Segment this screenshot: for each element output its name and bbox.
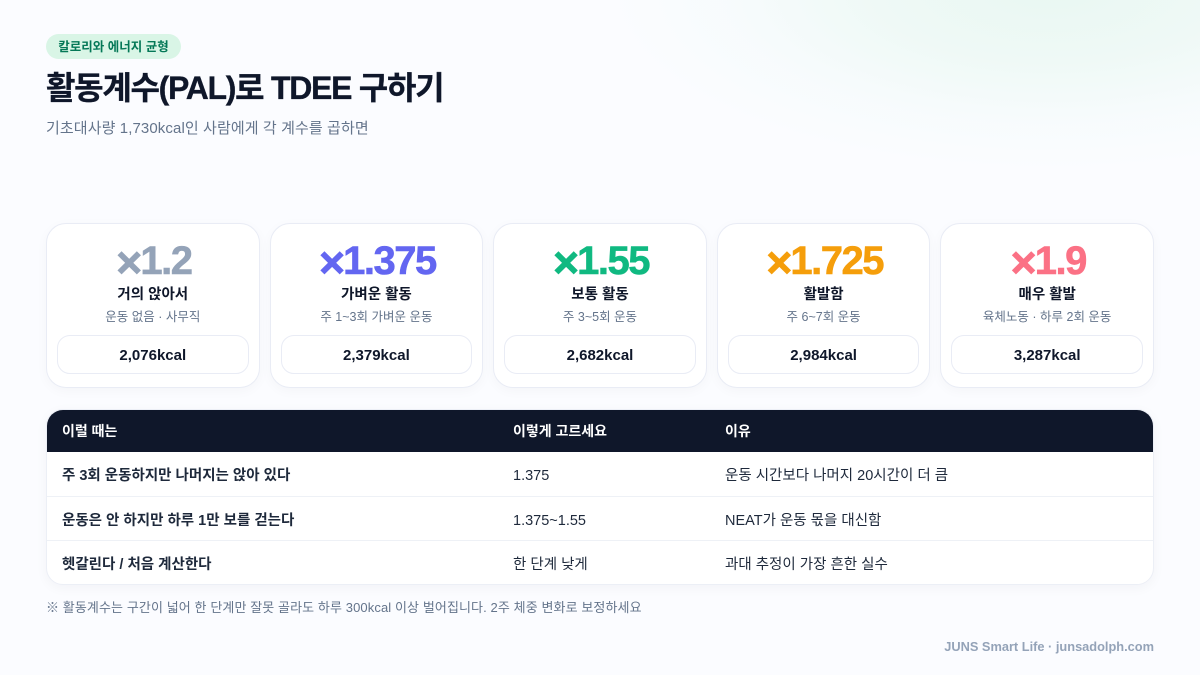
footnote: ※ 활동계수는 구간이 넓어 한 단계만 잘못 골라도 하루 300kcal 이상 벌어집니다. 2주 체중 변화로 보정하세요 [46, 600, 642, 615]
multiplier: ×1.2 [114, 239, 191, 283]
table row 2 [47, 497, 1153, 541]
kcal value: 2,379kcal [343, 347, 410, 364]
multiplier: ×1.375 [317, 239, 436, 283]
card: 가벼운 활동 [270, 223, 483, 388]
table header: 이렇게 고르세요 [513, 423, 607, 439]
activity name: 가벼운 활동 [341, 287, 412, 303]
table header [47, 410, 1153, 452]
kcal value [504, 335, 696, 374]
activity name: 거의 앉아서 [117, 287, 188, 303]
kcal value [728, 335, 919, 374]
table row 3: 과대 추정이 가장 흔한 실수 [725, 557, 888, 573]
kcal value: 2,984kcal [790, 347, 857, 364]
card: 매우 활발 [940, 223, 1154, 388]
kcal value: 3,287kcal [1014, 347, 1081, 364]
table row 3: 한 단계 낮게 [513, 557, 588, 573]
table row 3: 헷갈린다 / 처음 계산한다 [62, 557, 212, 573]
multiplier: ×1.725 [764, 239, 883, 283]
kcal value [951, 335, 1143, 374]
subtitle: 기초대사량 1,730kcal인 사람에게 각 계수를 곱하면 [46, 120, 369, 137]
kcal value: 2,682kcal [567, 347, 633, 364]
activity name: 매우 활발 [1018, 287, 1076, 303]
table row 1: 운동 시간보다 나머지 20시간이 더 큼 [725, 468, 948, 484]
badge: 칼로리와 에너지 균형 [58, 40, 169, 54]
title: 활동계수(PAL)로 TDEE 구하기 [46, 70, 443, 106]
description: 주 1~3회 가벼운 운동 [320, 310, 432, 324]
table header: 이유 [725, 423, 751, 439]
kcal value: 2,076kcal [119, 347, 186, 364]
kcal value [281, 335, 472, 374]
card: 활발함 [717, 223, 930, 388]
badge [46, 34, 181, 59]
recommendation table [46, 409, 1154, 585]
description: 주 6~7회 운동 [787, 310, 861, 324]
table row 3 [62, 556, 888, 573]
card: 거의 앉아서 [46, 223, 260, 388]
table header: 이럴 때는 [62, 423, 117, 439]
description: 육체노동 · 하루 2회 운동 [983, 310, 1111, 324]
multiplier: ×1.9 [1009, 239, 1086, 283]
table row 2: 운동은 안 하지만 하루 1만 보를 걷는다 [62, 513, 294, 529]
table row 1 [47, 452, 1153, 497]
activity name: 활발함 [804, 287, 844, 303]
card: 보통 활동 [493, 223, 707, 388]
description: 운동 없음 · 사무직 [105, 310, 200, 324]
activity name: 보통 활동 [571, 287, 629, 303]
source credit: JUNS Smart Life · junsadolph.com [944, 639, 1154, 654]
table row 1: 1.375 [513, 468, 549, 484]
multiplier: ×1.55 [551, 239, 649, 283]
kcal value [57, 335, 249, 374]
description: 주 3~5회 운동 [563, 310, 637, 324]
table row 2: NEAT가 운동 몫을 대신함 [725, 513, 881, 529]
table row 1: 주 3회 운동하지만 나머지는 앉아 있다 [62, 468, 290, 484]
table row 2: 1.375~1.55 [513, 513, 586, 529]
